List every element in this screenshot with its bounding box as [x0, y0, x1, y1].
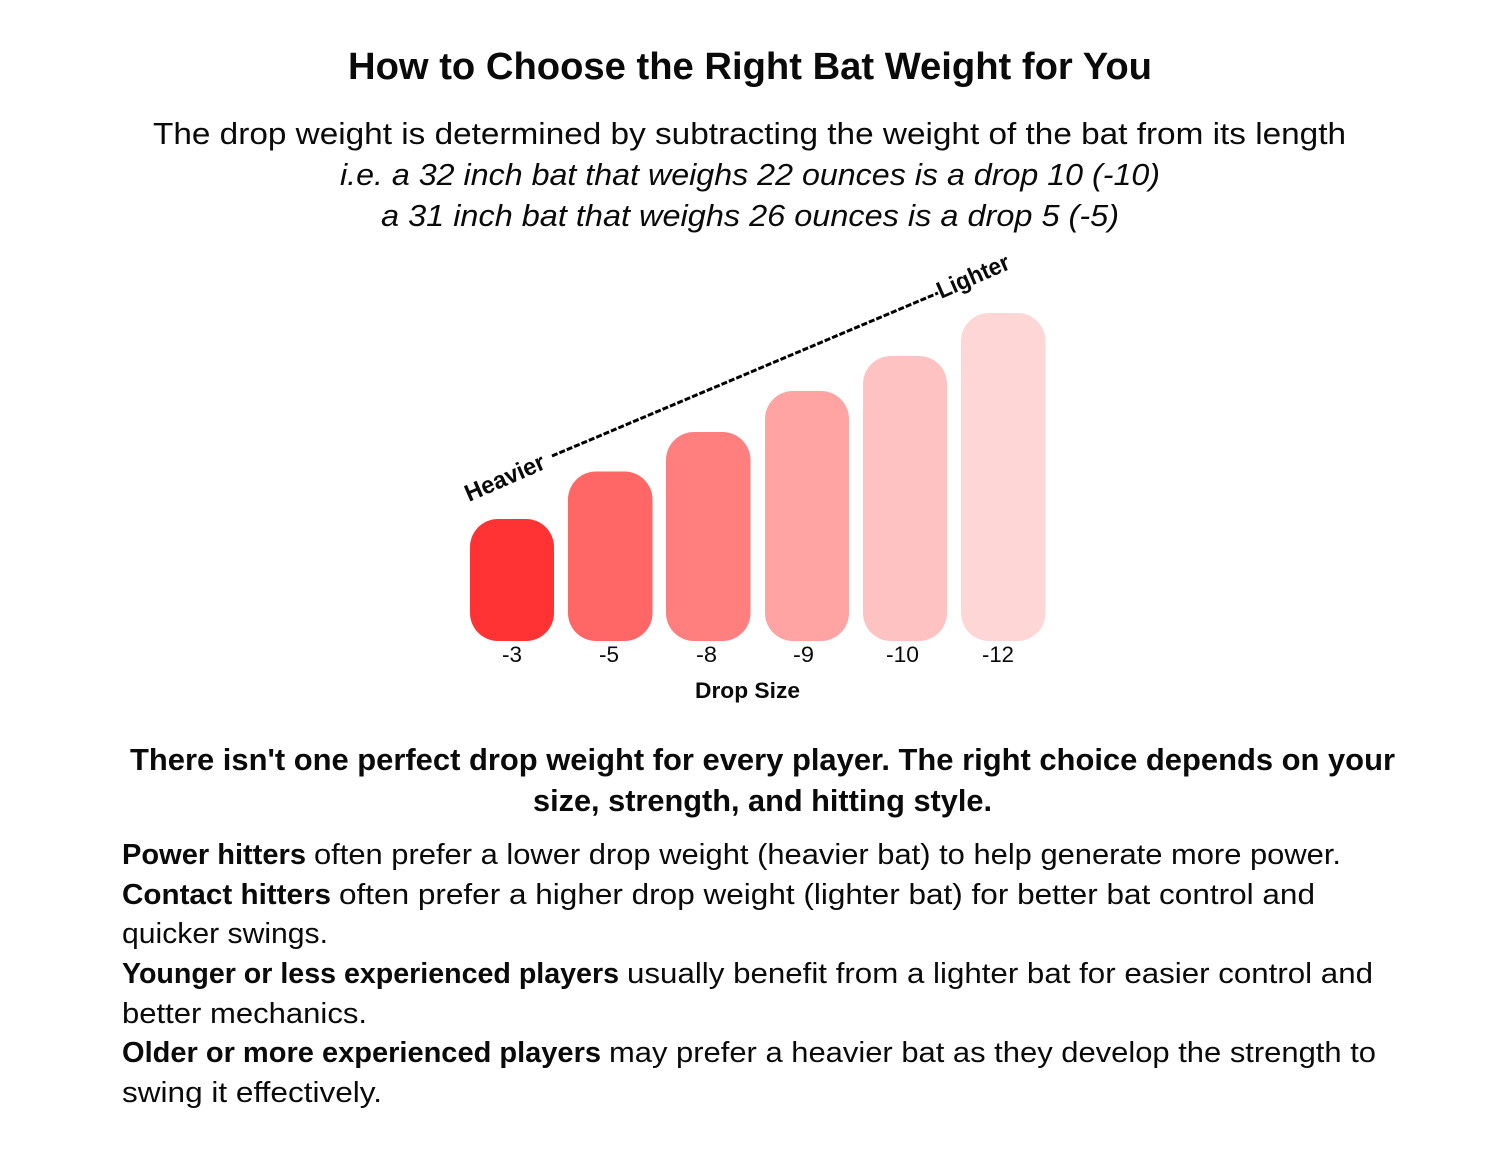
- younger players: [122, 958, 1373, 1030]
- bar -12: [961, 313, 1046, 641]
- bar chart: drop size: [461, 249, 1046, 703]
- younger players: Younger or less experienced players: [122, 958, 619, 990]
- lighter label: Lighter: [933, 249, 1014, 305]
- contact hitters: often prefer a higher drop weight (lighter bat) for better bat control and: [339, 879, 1315, 911]
- definition line: The drop weight is determined by subtracting the weight of the bat from its length: [153, 116, 1346, 151]
- bar -9: [765, 391, 849, 641]
- contact hitters: [122, 879, 1315, 950]
- body text block: [122, 839, 1376, 1109]
- bar -10: [863, 356, 947, 641]
- bar -3: [470, 519, 554, 641]
- takeaway heading: [130, 742, 1395, 818]
- bar -5: [568, 472, 652, 641]
- example one: i.e. a 32 inch bat that weighs 22 ounces is a drop 10 (-10): [340, 157, 1160, 192]
- contact hitters: quicker swings.: [122, 918, 328, 950]
- label -12: -12: [982, 642, 1014, 667]
- older players: [122, 1037, 1376, 1109]
- power hitters: Power hitters: [122, 839, 306, 871]
- label -3: -3: [502, 642, 522, 667]
- takeaway line one: There isn't one perfect drop weight for every player. The right choice depends on your: [130, 742, 1395, 777]
- older players: Older or more experienced players: [122, 1037, 601, 1069]
- axis title: Drop Size: [695, 678, 800, 703]
- younger players: better mechanics.: [122, 998, 367, 1030]
- label -5: -5: [599, 642, 619, 667]
- dashed arrow line: [552, 293, 938, 456]
- younger players: usually benefit from a lighter bat for easier control and: [627, 958, 1373, 990]
- example two: a 31 inch bat that weighs 26 ounces is a drop 5 (-5): [381, 198, 1119, 233]
- label -9: -9: [793, 642, 814, 667]
- heavier label: Heavier: [461, 449, 549, 508]
- takeaway line two: size, strength, and hitting style.: [533, 783, 992, 818]
- power hitters: often prefer a lower drop weight (heavier bat) to help generate more power.: [314, 839, 1341, 871]
- older players: swing it effectively.: [122, 1077, 382, 1109]
- bar -8: [666, 432, 750, 641]
- title: How to Choose the Right Bat Weight for You: [348, 46, 1152, 88]
- older players: may prefer a heavier bat as they develop the strength to: [609, 1037, 1376, 1069]
- label -8: -8: [696, 642, 717, 667]
- label -10: -10: [886, 642, 919, 667]
- contact hitters: Contact hitters: [122, 879, 331, 911]
- intro text block: [153, 116, 1346, 233]
